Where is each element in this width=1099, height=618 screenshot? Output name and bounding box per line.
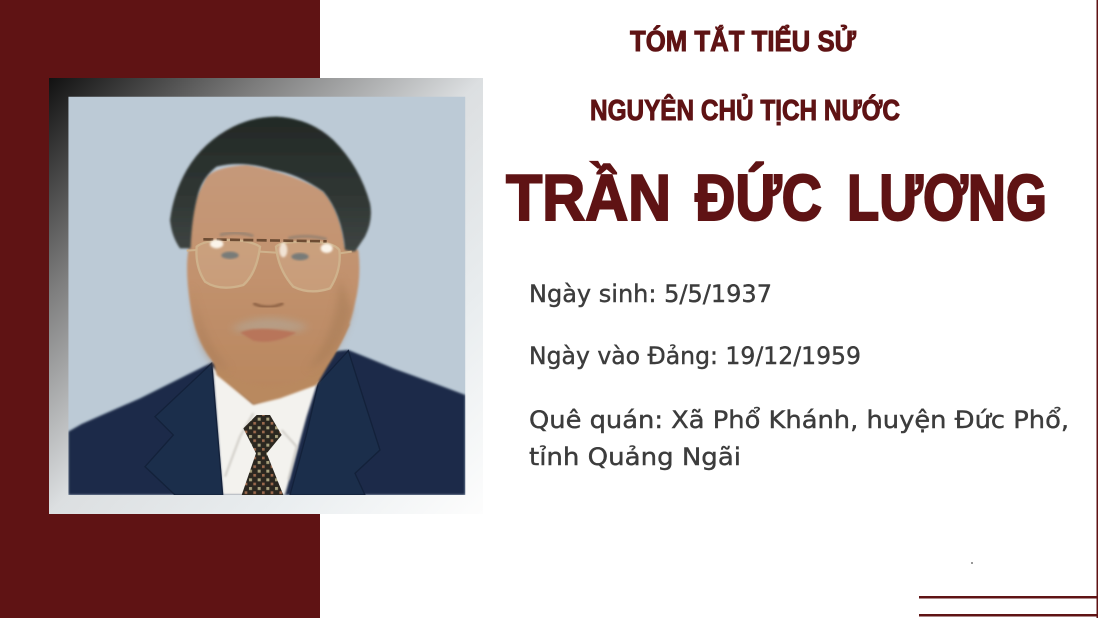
party entry date: Ngày vào Đảng: 19/12/1959: [529, 342, 861, 370]
neck: [207, 323, 350, 405]
face shading: [191, 317, 214, 368]
left maroon panel: [0, 0, 320, 618]
eyebrows: [220, 233, 327, 239]
portrait photo: [68, 97, 465, 495]
name: trần đức lương: ĐỨC: [695, 161, 822, 234]
name: trần đức lương: [506, 161, 1047, 234]
bottom decorative lines: [919, 596, 1098, 616]
collar shadow: [225, 413, 297, 480]
mouth: [240, 329, 297, 342]
subtitle: nguyên chủ tịch nước: NGUYÊN CHỦ TỊCH NƯỚC: [590, 93, 900, 127]
tie: [242, 415, 283, 495]
right edge line: [1096, 0, 1098, 618]
lens highlights: [210, 240, 333, 257]
hometown: [529, 406, 1069, 471]
face: [187, 165, 359, 387]
moustache: [230, 318, 310, 332]
hair: [170, 117, 371, 252]
jacket: [68, 350, 465, 495]
hometown: Quê quán: Xã Phổ Khánh, huyện Đức Phổ,: [529, 406, 1069, 434]
portrait frame: [49, 78, 483, 514]
name: trần đức lương: LƯƠNG: [847, 161, 1047, 234]
name: trần đức lương: TRẦN: [506, 161, 671, 234]
title: tóm tắt tiểu sử: TÓM TẮT TIỂU SỬ: [630, 24, 857, 58]
glasses: [196, 240, 340, 291]
lapels: [145, 351, 380, 495]
hometown: tỉnh Quảng Ngãi: [529, 443, 741, 471]
birth date: Ngày sinh: 5/5/1937: [529, 280, 772, 308]
shirt: [213, 367, 318, 495]
nose: [253, 303, 283, 307]
eyes: [221, 252, 239, 259]
